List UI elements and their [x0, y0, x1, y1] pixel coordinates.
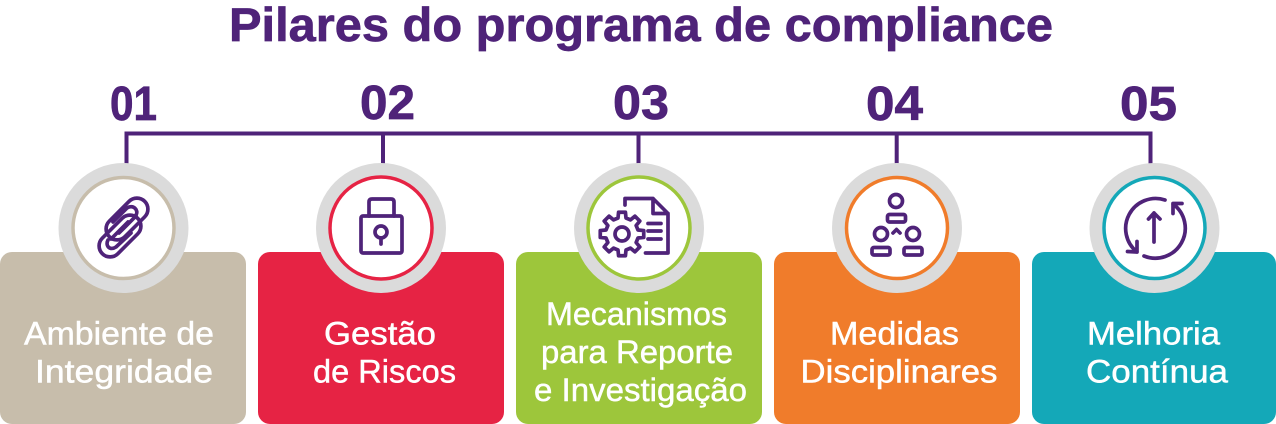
icon badge: [574, 163, 704, 293]
label: [534, 296, 747, 408]
icon: padlock: [361, 199, 402, 253]
card: [1032, 252, 1276, 424]
label: Ambiente de: [24, 316, 214, 352]
card: [774, 252, 1020, 424]
label: de Riscos: [313, 354, 456, 390]
label: Mecanismos: [546, 296, 727, 332]
panel: Medidas Disciplinares: [774, 163, 1020, 424]
label: [24, 316, 214, 390]
panel: Gestão de Riscos: [258, 163, 504, 424]
panel: Mecanismos para Reporte e Investigação: [516, 163, 762, 424]
card: [0, 252, 246, 424]
icon: improvement cycle: [1126, 199, 1185, 258]
timeline connector: [126, 134, 1150, 165]
number 04: 04: [866, 78, 923, 131]
icon badge: [1090, 163, 1220, 293]
label: [313, 316, 456, 390]
icon: gear and document: [600, 198, 668, 256]
number 02: 02: [360, 77, 415, 130]
icon badge: [58, 163, 188, 293]
label: e Investigação: [534, 372, 747, 408]
card: [516, 252, 762, 424]
label: Disciplinares: [800, 354, 998, 390]
label: Gestão: [324, 316, 436, 352]
icon badge: [316, 163, 446, 293]
label: Contínua: [1086, 354, 1228, 390]
panel: Ambiente de Integridade: [0, 163, 246, 424]
icon: paperclips: [95, 194, 152, 261]
icon: people hierarchy: [872, 194, 922, 255]
label: [1086, 316, 1228, 390]
panel: Melhoria Contínua: [1032, 163, 1276, 424]
label: [800, 316, 998, 390]
label: Integridade: [35, 354, 213, 390]
label: Melhoria: [1087, 316, 1220, 352]
number 03: 03: [613, 77, 669, 130]
number 05: 05: [1120, 78, 1177, 131]
label: para Reporte: [541, 334, 733, 370]
number 01: 01: [110, 78, 157, 131]
label: Medidas: [830, 316, 959, 352]
icon badge: [832, 163, 962, 293]
card: [258, 252, 504, 424]
